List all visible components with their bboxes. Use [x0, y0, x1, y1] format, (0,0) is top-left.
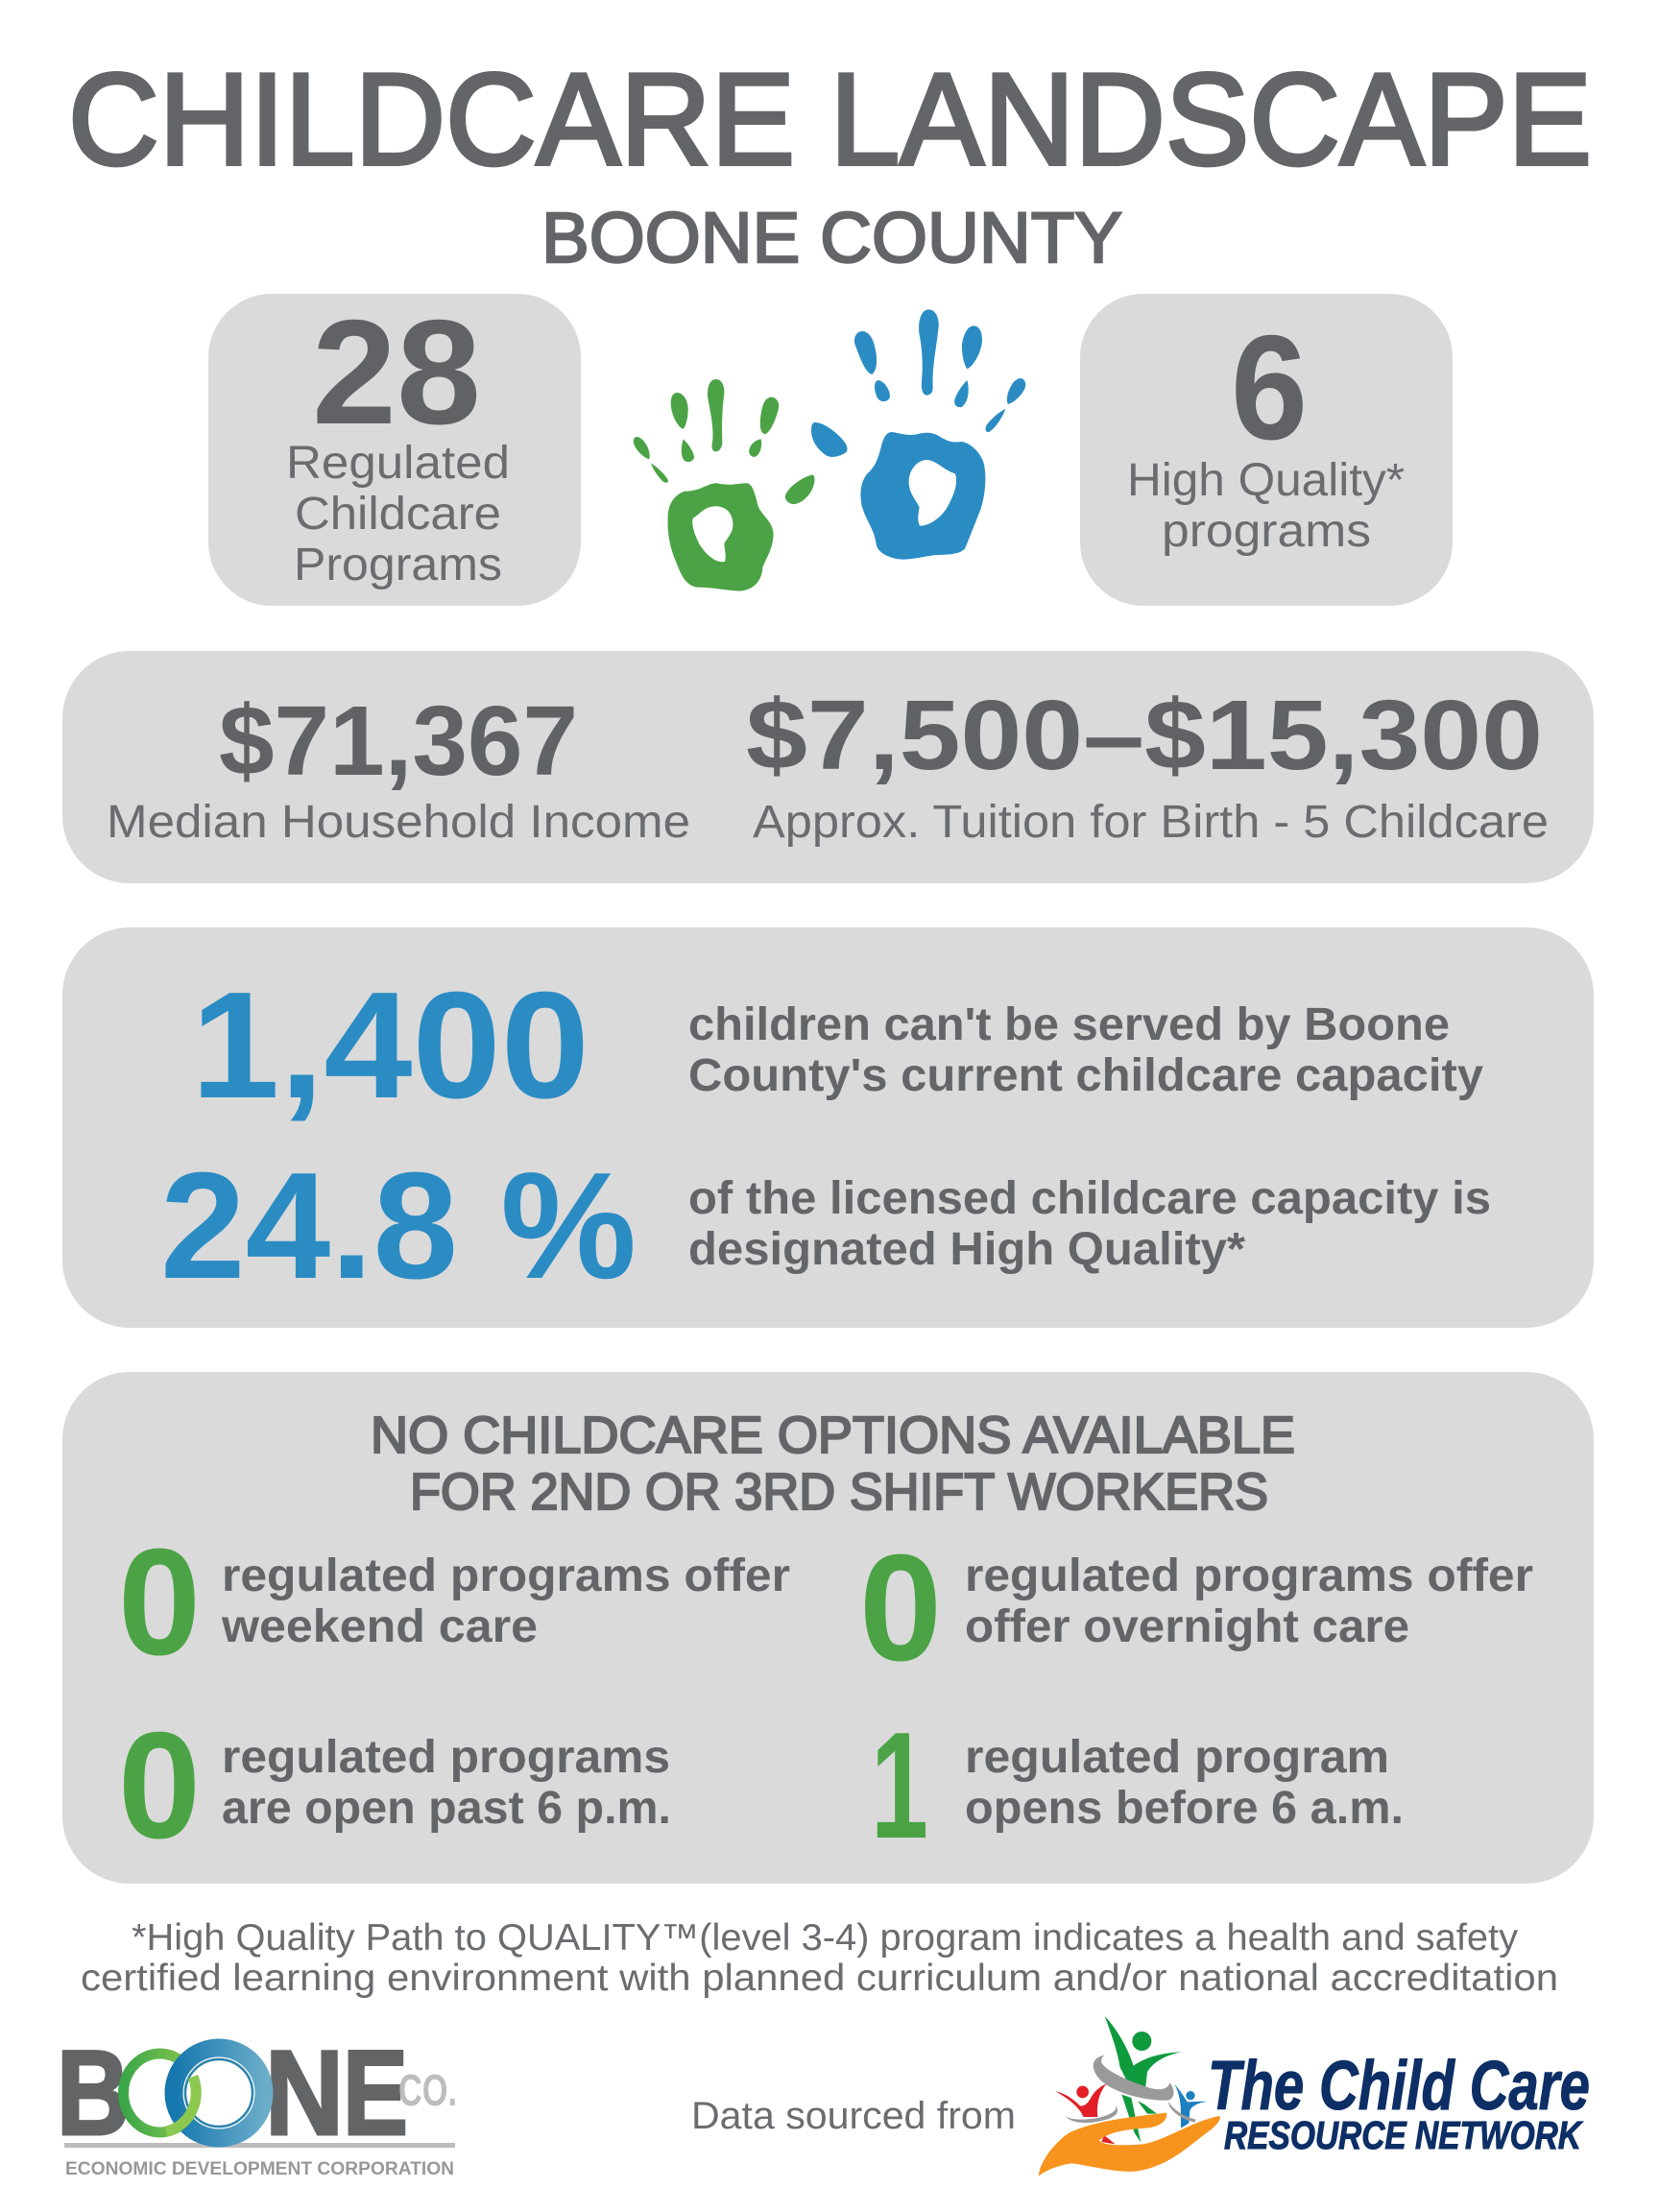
icon: hand and figures	[1039, 2016, 1220, 2176]
stat: 28: 28	[312, 289, 481, 455]
logo: The Child Care Resource Network	[1039, 2016, 1590, 2176]
stat: open past 6 p.m.: 0	[118, 1701, 201, 1870]
heading: no childcare options: NO CHILDCARE OPTIONS AVAILABLE	[371, 1407, 1295, 1464]
stat: open past 6 p.m.: are open past 6 p.m.	[222, 1783, 671, 1834]
footnote: *High Quality Path to QUALITY™(level 3-4) program indicates a health and safety	[132, 1917, 1519, 1959]
title: CHILDCARE LANDSCAPE	[68, 46, 1592, 192]
stat: weekend care: 0	[118, 1518, 201, 1687]
panel: shift workers	[62, 1372, 1594, 1884]
stat: opens before 6 a.m.: regulated program	[965, 1732, 1389, 1783]
label: regulated childcare programs: Regulated	[286, 438, 510, 489]
stat: open past 6 p.m.	[118, 1701, 671, 1870]
icon: handprints	[634, 309, 1025, 591]
logo: Boone Co. Economic Development Corporation: E	[343, 2027, 408, 2160]
logo: Boone Co. Economic Development Corporation: ECONOMIC DEVELOPMENT CORPORATION	[65, 2159, 454, 2179]
logo: Boone Co. Economic Development Corporation: N	[265, 2027, 344, 2160]
label: regulated childcare programs: Programs	[294, 540, 502, 590]
credit: data sourced from: Data sourced from	[691, 2095, 1016, 2137]
stat: median household income: Median Household Income	[107, 797, 690, 848]
stat: median household income: $71,367	[219, 685, 578, 796]
stat: 1,400: 1,400	[191, 961, 589, 1130]
stat: overnight care: regulated programs offer	[965, 1551, 1533, 1601]
stat: overnight care: 0	[859, 1524, 942, 1693]
stat: 24.8%	[160, 1142, 1491, 1310]
heading: no childcare options	[371, 1407, 1295, 1521]
stat: 6: 6	[1231, 304, 1308, 470]
label: high quality programs	[1127, 455, 1405, 557]
label: regulated childcare programs	[286, 438, 510, 590]
logo: Boone Co. Economic Development Corporation: CO.	[398, 2065, 457, 2115]
stat: median household income	[107, 685, 690, 848]
stat: approximate tuition: $7,500–$15,300	[746, 680, 1543, 790]
logo: Boone Co. Economic Development Corporation	[57, 2027, 457, 2179]
panel: income and tuition	[62, 651, 1594, 883]
stat: weekend care	[118, 1518, 790, 1687]
subtitle: BOONE COUNTY	[541, 198, 1122, 277]
stat: overnight care: offer overnight care	[965, 1601, 1409, 1652]
stat: open past 6 p.m.: regulated programs	[222, 1732, 670, 1783]
stat: weekend care: weekend care	[221, 1601, 538, 1652]
label: regulated childcare programs: Childcare	[295, 489, 501, 540]
heading: no childcare options: FOR 2ND OR 3RD SHIFT WORKERS	[410, 1463, 1268, 1521]
panel: regulated programs	[208, 289, 581, 606]
icon: green handprint	[634, 379, 814, 591]
label: high quality programs: programs	[1162, 506, 1371, 557]
stat: weekend care: regulated programs offer	[222, 1551, 790, 1601]
footnote	[81, 1917, 1558, 1999]
stat: 1,400: County's current childcare capacity	[688, 1050, 1483, 1101]
wordmark	[1208, 2048, 1590, 2157]
stat: opens before 6 a.m.	[871, 1701, 1404, 1870]
stat: opens before 6 a.m.: opens before 6 a.m.	[965, 1783, 1404, 1834]
stat: 24.8%: 24.8 %	[160, 1142, 637, 1310]
stat: 24.8%: designated High Quality*	[688, 1224, 1245, 1275]
panel: capacity	[62, 927, 1594, 1328]
stat: overnight care	[859, 1524, 1533, 1693]
panel: high quality programs	[1080, 294, 1453, 606]
stat: 1,400: children can't be served by Boone	[688, 999, 1450, 1050]
stat: 1,400	[191, 961, 1483, 1130]
icon: blue handprint	[811, 309, 1025, 560]
logo: Boone Co. Economic Development Corporation: B	[57, 2027, 130, 2160]
stat: approximate tuition	[746, 680, 1549, 848]
footnote: certified learning environment with planned curriculum and/or national accreditation	[81, 1958, 1558, 1999]
stat: 24.8%: of the licensed childcare capacity is	[688, 1173, 1491, 1224]
stat: opens before 6 a.m.: 1	[871, 1701, 928, 1870]
label: high quality programs: High Quality*	[1127, 455, 1405, 506]
wordmark: RESOURCE NETWORK	[1224, 2113, 1584, 2157]
stat: approximate tuition: Approx. Tuition for Birth - 5 Childcare	[753, 797, 1549, 848]
